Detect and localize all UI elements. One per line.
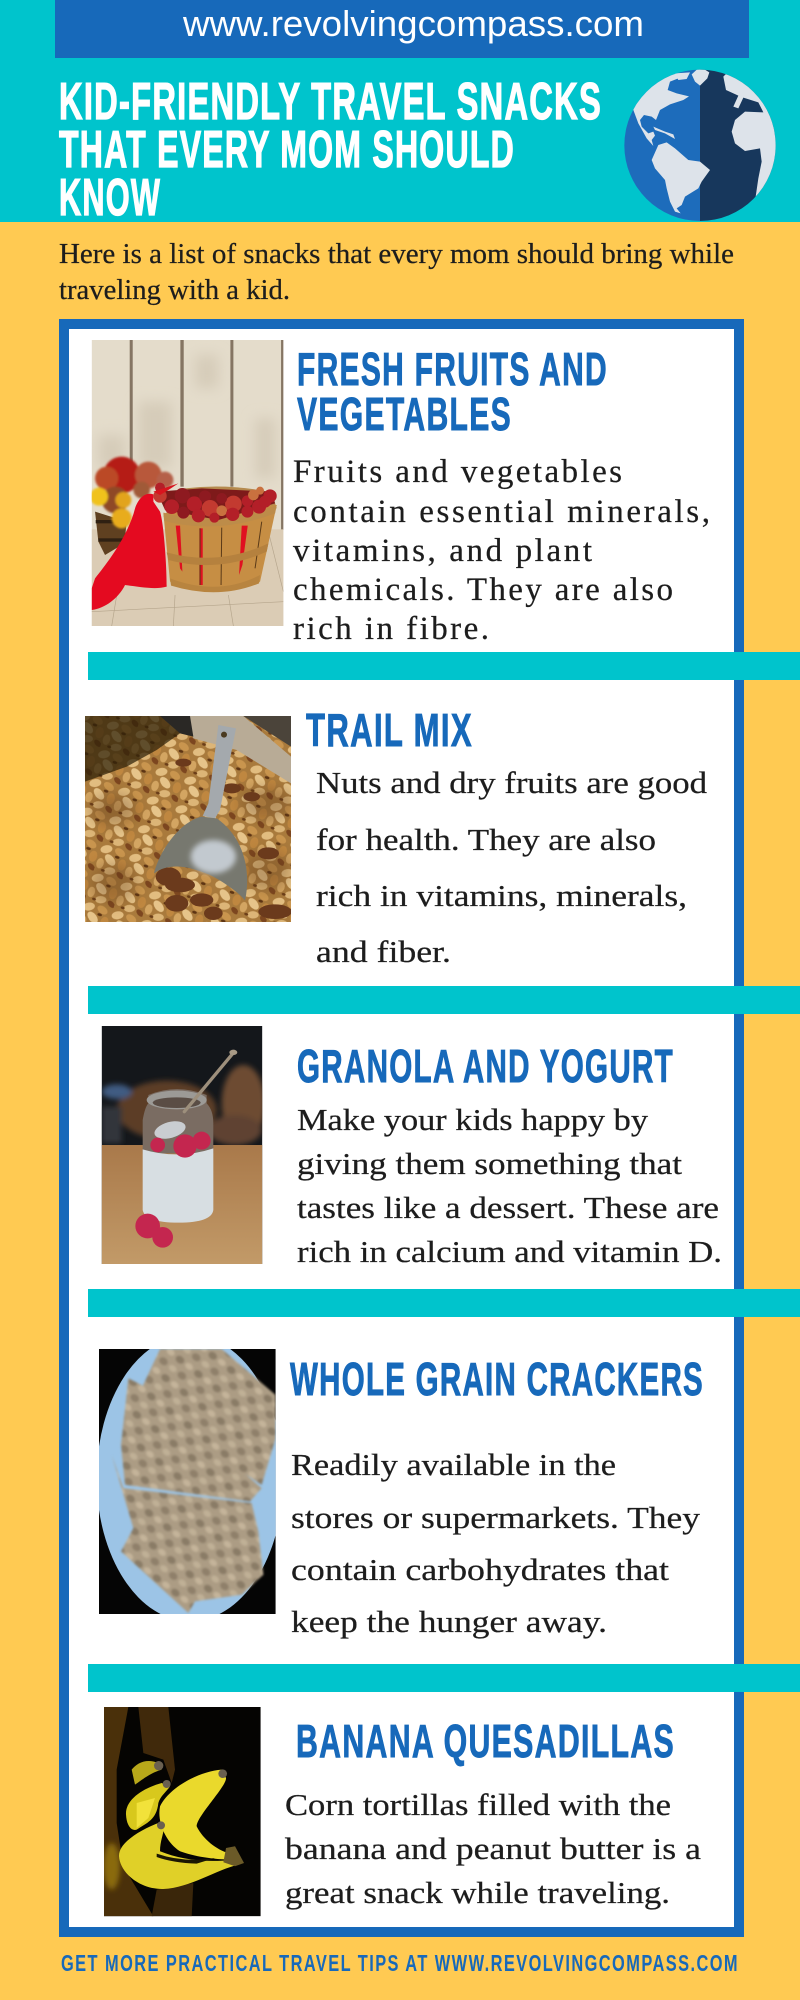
body text: Fruits and vegetables bbox=[293, 454, 622, 490]
body text: chemicals. They are also bbox=[293, 572, 673, 608]
divider bar 3 bbox=[88, 1289, 800, 1317]
panel: granola and yogurt bbox=[102, 1026, 722, 1269]
body text: rich in vitamins, minerals, bbox=[316, 878, 687, 913]
body text bbox=[316, 765, 708, 969]
body text: Nuts and dry fruits are good bbox=[316, 765, 708, 800]
body text: Readily available in the bbox=[291, 1447, 616, 1482]
body text: banana and peanut butter is a bbox=[285, 1831, 701, 1866]
intro text: Here is a list of snacks that every mom should bring while bbox=[59, 238, 734, 270]
panel: snack list frame bbox=[64, 324, 739, 1932]
body text: giving them something that bbox=[297, 1146, 682, 1181]
body text: and fiber. bbox=[316, 934, 451, 969]
photo: bananas on dark wood bbox=[104, 1707, 261, 1916]
header band bbox=[0, 0, 800, 227]
body text: contain essential minerals, bbox=[293, 494, 710, 530]
body text: Corn tortillas filled with the bbox=[285, 1787, 671, 1822]
panel: banana quesadillas bbox=[103, 1707, 701, 1916]
body text: rich in calcium and vitamin D. bbox=[297, 1234, 722, 1269]
body text: great snack while traveling. bbox=[285, 1875, 670, 1910]
divider bar 2 bbox=[88, 986, 800, 1014]
panel: trail mix bbox=[85, 704, 708, 969]
icon: globe bbox=[624, 70, 776, 221]
divider bar 4 bbox=[88, 1664, 800, 1692]
website banner: www.revolvingcompass.com bbox=[182, 3, 644, 44]
heading: VEGETABLES bbox=[297, 388, 512, 440]
photo: apples in a basket bbox=[92, 340, 284, 626]
intro text: traveling with a kid. bbox=[59, 274, 290, 306]
website banner bbox=[55, 0, 749, 58]
intro text bbox=[59, 238, 734, 306]
panel: whole grain crackers bbox=[97, 1335, 704, 1639]
body text: for health. They are also bbox=[316, 822, 656, 857]
body text: stores or supermarkets. They bbox=[291, 1500, 701, 1535]
photo: crackers on a blue plate bbox=[99, 1349, 276, 1614]
body text: tastes like a dessert. These are bbox=[297, 1190, 719, 1225]
heading bbox=[297, 343, 608, 440]
title: KNOW bbox=[59, 169, 161, 227]
body text: keep the hunger away. bbox=[291, 1604, 607, 1639]
title: THAT EVERY MOM SHOULD bbox=[59, 121, 515, 179]
body text bbox=[291, 1447, 701, 1639]
panel: fresh fruits and vegetables bbox=[90, 340, 710, 647]
title bbox=[59, 73, 602, 227]
body text bbox=[293, 454, 710, 647]
body text: vitamins, and plant bbox=[293, 533, 592, 569]
divider bar 1 bbox=[88, 652, 800, 680]
body text: contain carbohydrates that bbox=[291, 1552, 669, 1587]
heading: TRAIL MIX bbox=[306, 704, 473, 756]
heading: FRESH FRUITS AND bbox=[297, 343, 608, 395]
body text bbox=[285, 1787, 701, 1910]
body text: rich in fibre. bbox=[293, 611, 489, 647]
body text bbox=[297, 1102, 722, 1269]
photo: nuts with a scoop bbox=[85, 716, 291, 922]
body text: Make your kids happy by bbox=[297, 1102, 649, 1137]
photo: yogurt jar with raspberries bbox=[102, 1026, 262, 1264]
